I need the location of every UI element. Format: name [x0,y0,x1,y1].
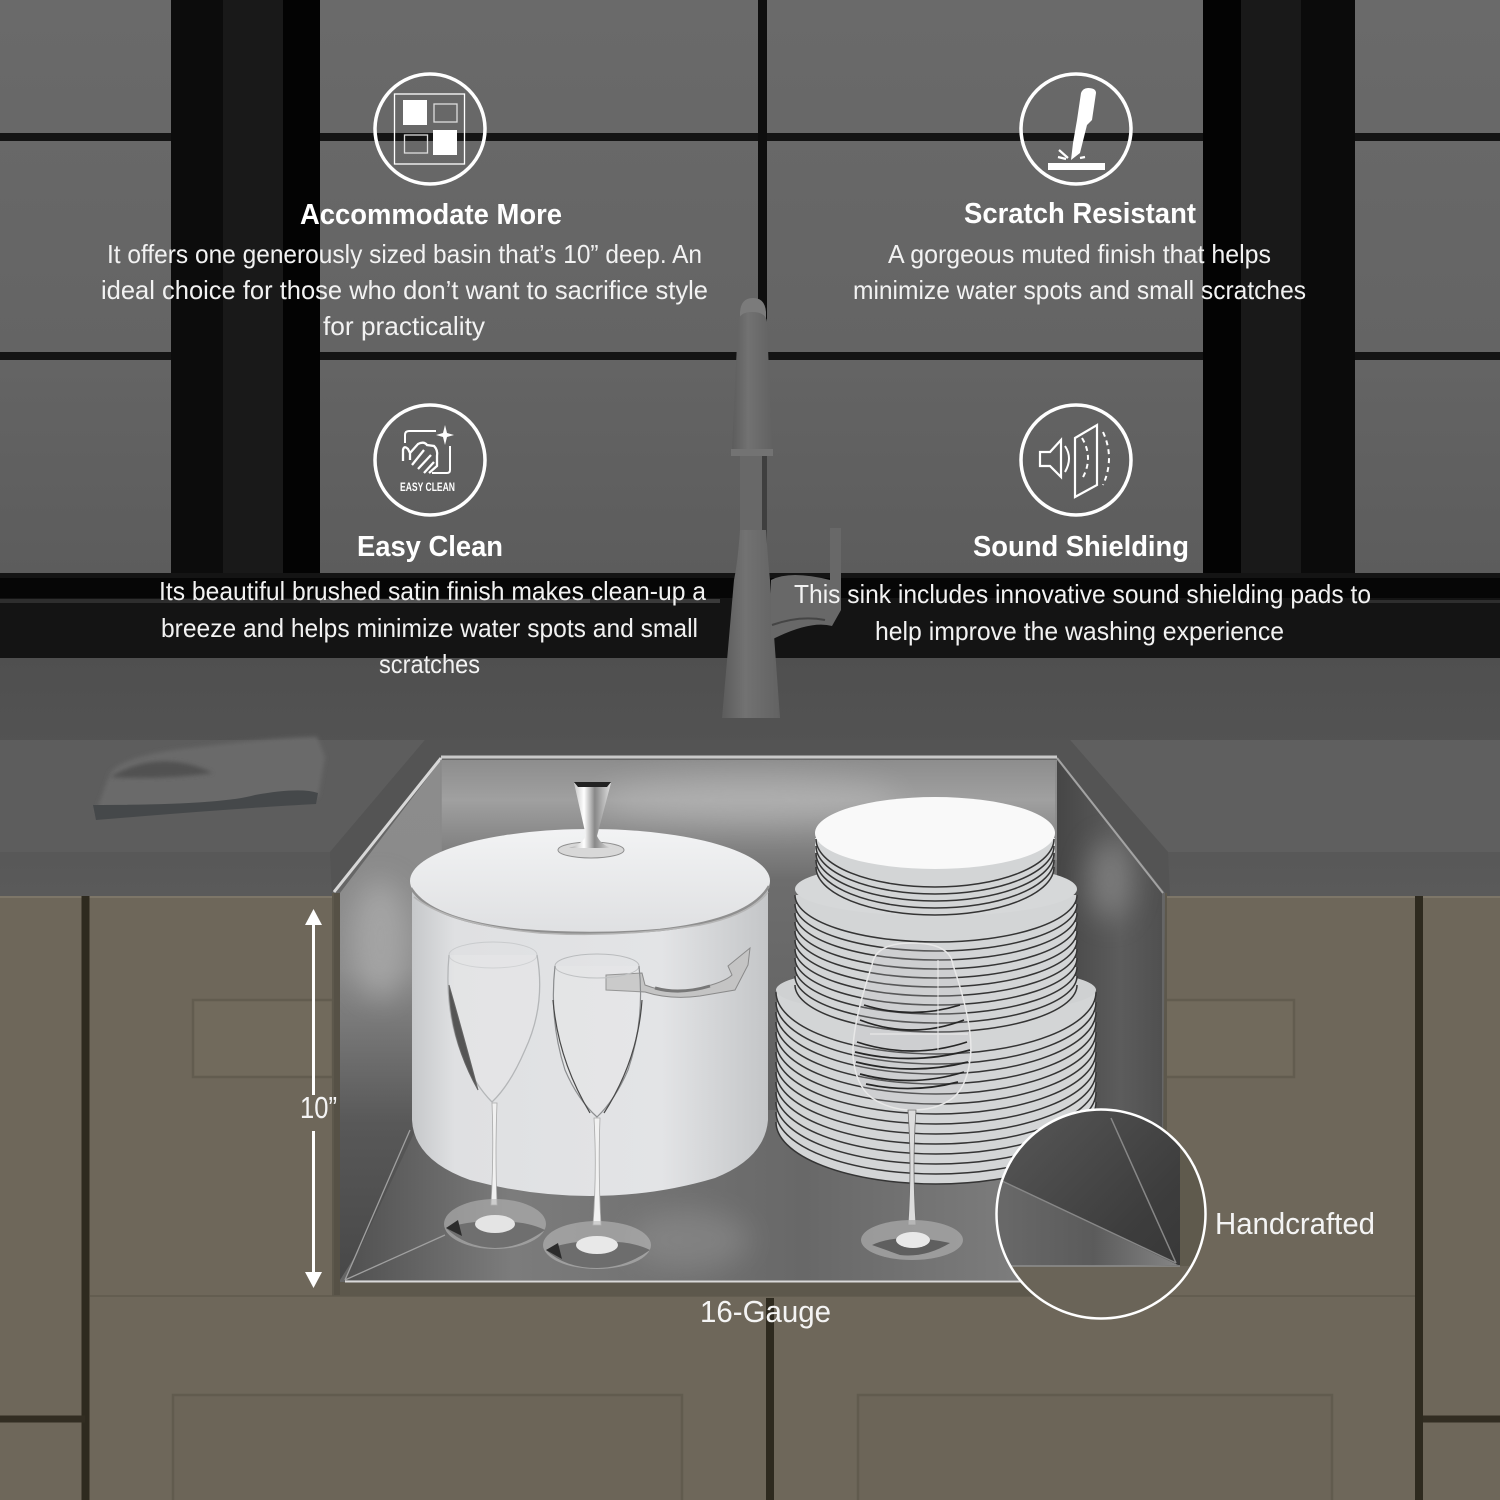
icon: squares in a frame [375,74,485,184]
heading: Easy Clean [357,531,503,563]
description: This sink includes innovative sound shielding pads to [794,579,1371,609]
right drawer panel [1165,1000,1294,1077]
description: minimize water spots and small scratches [853,275,1306,305]
cabinets [0,896,1500,1500]
description: scratches [379,649,480,679]
heading: Scratch Resistant [964,198,1196,230]
pot body [412,885,768,1196]
window bottom frame [0,573,1500,658]
description: for practicality [323,311,485,341]
lid knob [558,782,624,858]
faucet [722,298,841,718]
description: breeze and helps minimize water spots and small [161,613,698,643]
glass reflections [855,1005,970,1089]
top lip highlight [441,756,1057,758]
champagne flute left [444,942,546,1249]
faucet handle [771,528,841,640]
center mullion [758,0,767,660]
description: Its beautiful brushed satin finish makes clean-up a [159,576,707,606]
left wall [340,760,441,1280]
cabinet gaps [86,896,1419,1500]
upper glazing bars [0,133,1500,141]
right post [1203,0,1355,600]
flute foot [543,1221,651,1269]
bottom right door panel [858,1395,1332,1500]
feature: sound shielding [794,405,1371,646]
icon: speaker and shield panel [1021,405,1131,515]
right rim highlight [1057,758,1163,893]
floor [346,1110,1018,1280]
large plate stack [776,965,1096,1184]
countertop [0,658,1500,898]
description [853,239,1306,305]
label: 16-gauge: 16-Gauge [700,1294,831,1329]
corner seams [1000,1118,1176,1263]
lid rim [411,886,769,933]
heading: Accommodate More [300,199,562,231]
glass foot [861,1220,963,1260]
wine glass [853,943,971,1260]
arrow head up [305,909,322,925]
medium plate stack [795,862,1077,1032]
lower glazing bars [0,352,1500,360]
olive frame edge [332,893,1167,1296]
handcrafted detail circle [990,1100,1210,1326]
window background [0,0,1500,660]
pot lid [410,829,770,933]
right wall [1057,760,1162,1282]
sink basin [332,757,1180,1296]
left post [171,0,320,600]
heading: Sound Shielding [973,531,1189,563]
description: A gorgeous muted finish that helps [888,239,1271,269]
description: ideal choice for those who don’t want to sacrifice style [101,275,708,305]
champagne flute right [543,954,651,1269]
pot with lid [410,782,770,1196]
description [159,576,707,679]
icon: hand wiping: EASY CLEAN [400,480,455,494]
bottom left door panel [173,1395,682,1500]
flute foot [444,1199,546,1249]
small plate stack [815,797,1055,917]
depth arrow [305,909,322,1288]
label: handcrafted: Handcrafted [1215,1206,1375,1241]
left rim highlight [334,758,441,892]
wall glows [350,880,410,1000]
counter surface left [0,740,425,852]
counter surface right [1070,740,1500,852]
description: It offers one generously sized basin that’s 10” deep. An [107,239,702,269]
back wall [441,760,1057,1160]
feature: accommodate more [101,74,708,341]
front bottom edge [345,1280,1030,1282]
corner floor [998,1182,1178,1266]
arrow head down [305,1272,322,1288]
plate stacks [776,797,1096,1184]
description: help improve the washing experience [875,616,1284,646]
recess around sink [330,740,1170,896]
icon: hand wiping [375,405,485,515]
label: 10 inch depth: 10” [300,1090,337,1125]
feature: easy clean [159,405,707,679]
left drawer panel [193,1000,333,1077]
icon: tool scratching a surface [1021,74,1131,184]
feature: scratch resistant [853,74,1306,305]
pot handle [606,948,750,997]
description [794,579,1371,646]
description [101,239,708,341]
towel on counter [93,737,325,820]
